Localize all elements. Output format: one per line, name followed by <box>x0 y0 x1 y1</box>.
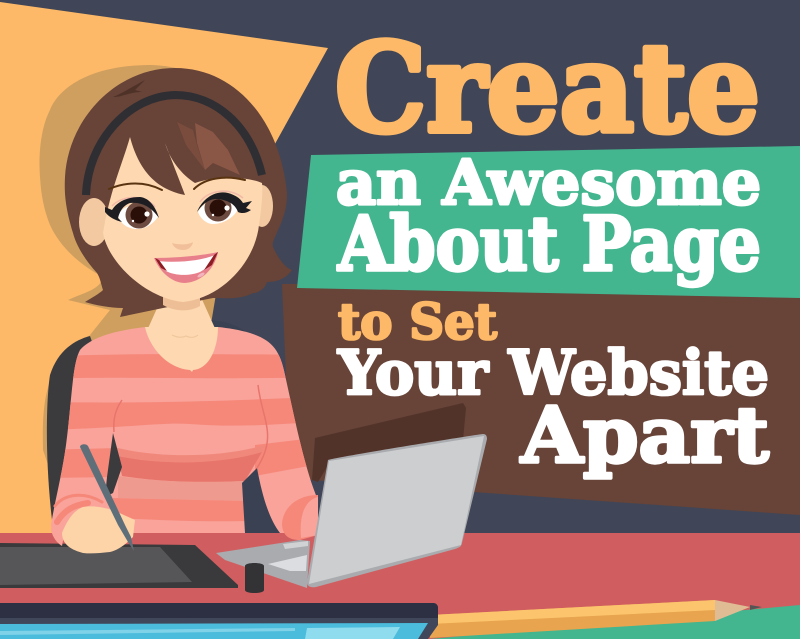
hair highlight <box>177 122 240 175</box>
face <box>103 137 262 302</box>
hair back <box>65 68 292 317</box>
right cuff <box>282 495 318 540</box>
neckline <box>145 327 218 370</box>
eye right <box>197 191 252 224</box>
monitor frame <box>0 603 438 639</box>
laptop shadow <box>312 403 466 482</box>
nose <box>172 242 193 250</box>
ears <box>79 185 273 246</box>
pen <box>80 444 134 551</box>
orange backdrop shape <box>0 2 328 533</box>
title: Your Website: Your Website <box>337 338 769 409</box>
eyebrows <box>109 178 245 190</box>
left sleeve end <box>51 525 66 546</box>
eye left <box>105 197 159 229</box>
chin shadow <box>163 296 200 310</box>
shoulder shadow <box>43 318 170 500</box>
title: Apart: Apart <box>520 391 769 481</box>
left cuff stripes <box>55 495 102 522</box>
mouth <box>154 252 218 283</box>
drawing tablet <box>0 543 238 588</box>
sweater fold lines <box>114 385 268 468</box>
woman character <box>39 65 330 545</box>
hand <box>62 506 135 553</box>
laptop base <box>216 540 310 588</box>
neck crease <box>172 335 198 337</box>
neck <box>145 295 218 375</box>
arm gap left <box>105 433 122 497</box>
teal title band <box>297 146 800 298</box>
pencil <box>430 600 762 638</box>
headband <box>86 95 262 195</box>
teal bottom corner <box>430 605 800 639</box>
pink desk <box>0 533 800 639</box>
title: to Set: to Set <box>338 292 497 351</box>
arm gap right <box>242 468 280 533</box>
hair shadow <box>39 65 240 335</box>
finger <box>100 530 123 548</box>
chair <box>47 320 300 533</box>
title: an Awesome: an Awesome <box>336 146 761 219</box>
monitor screen <box>0 623 428 639</box>
title: Create: Create <box>335 16 760 160</box>
sweater <box>51 327 316 533</box>
keyboard <box>268 555 307 571</box>
laptop lid <box>307 434 487 587</box>
hair strands <box>113 80 145 97</box>
brown title band <box>282 284 800 515</box>
stylus holder <box>245 563 264 593</box>
laptop <box>216 434 487 588</box>
head <box>65 68 292 317</box>
